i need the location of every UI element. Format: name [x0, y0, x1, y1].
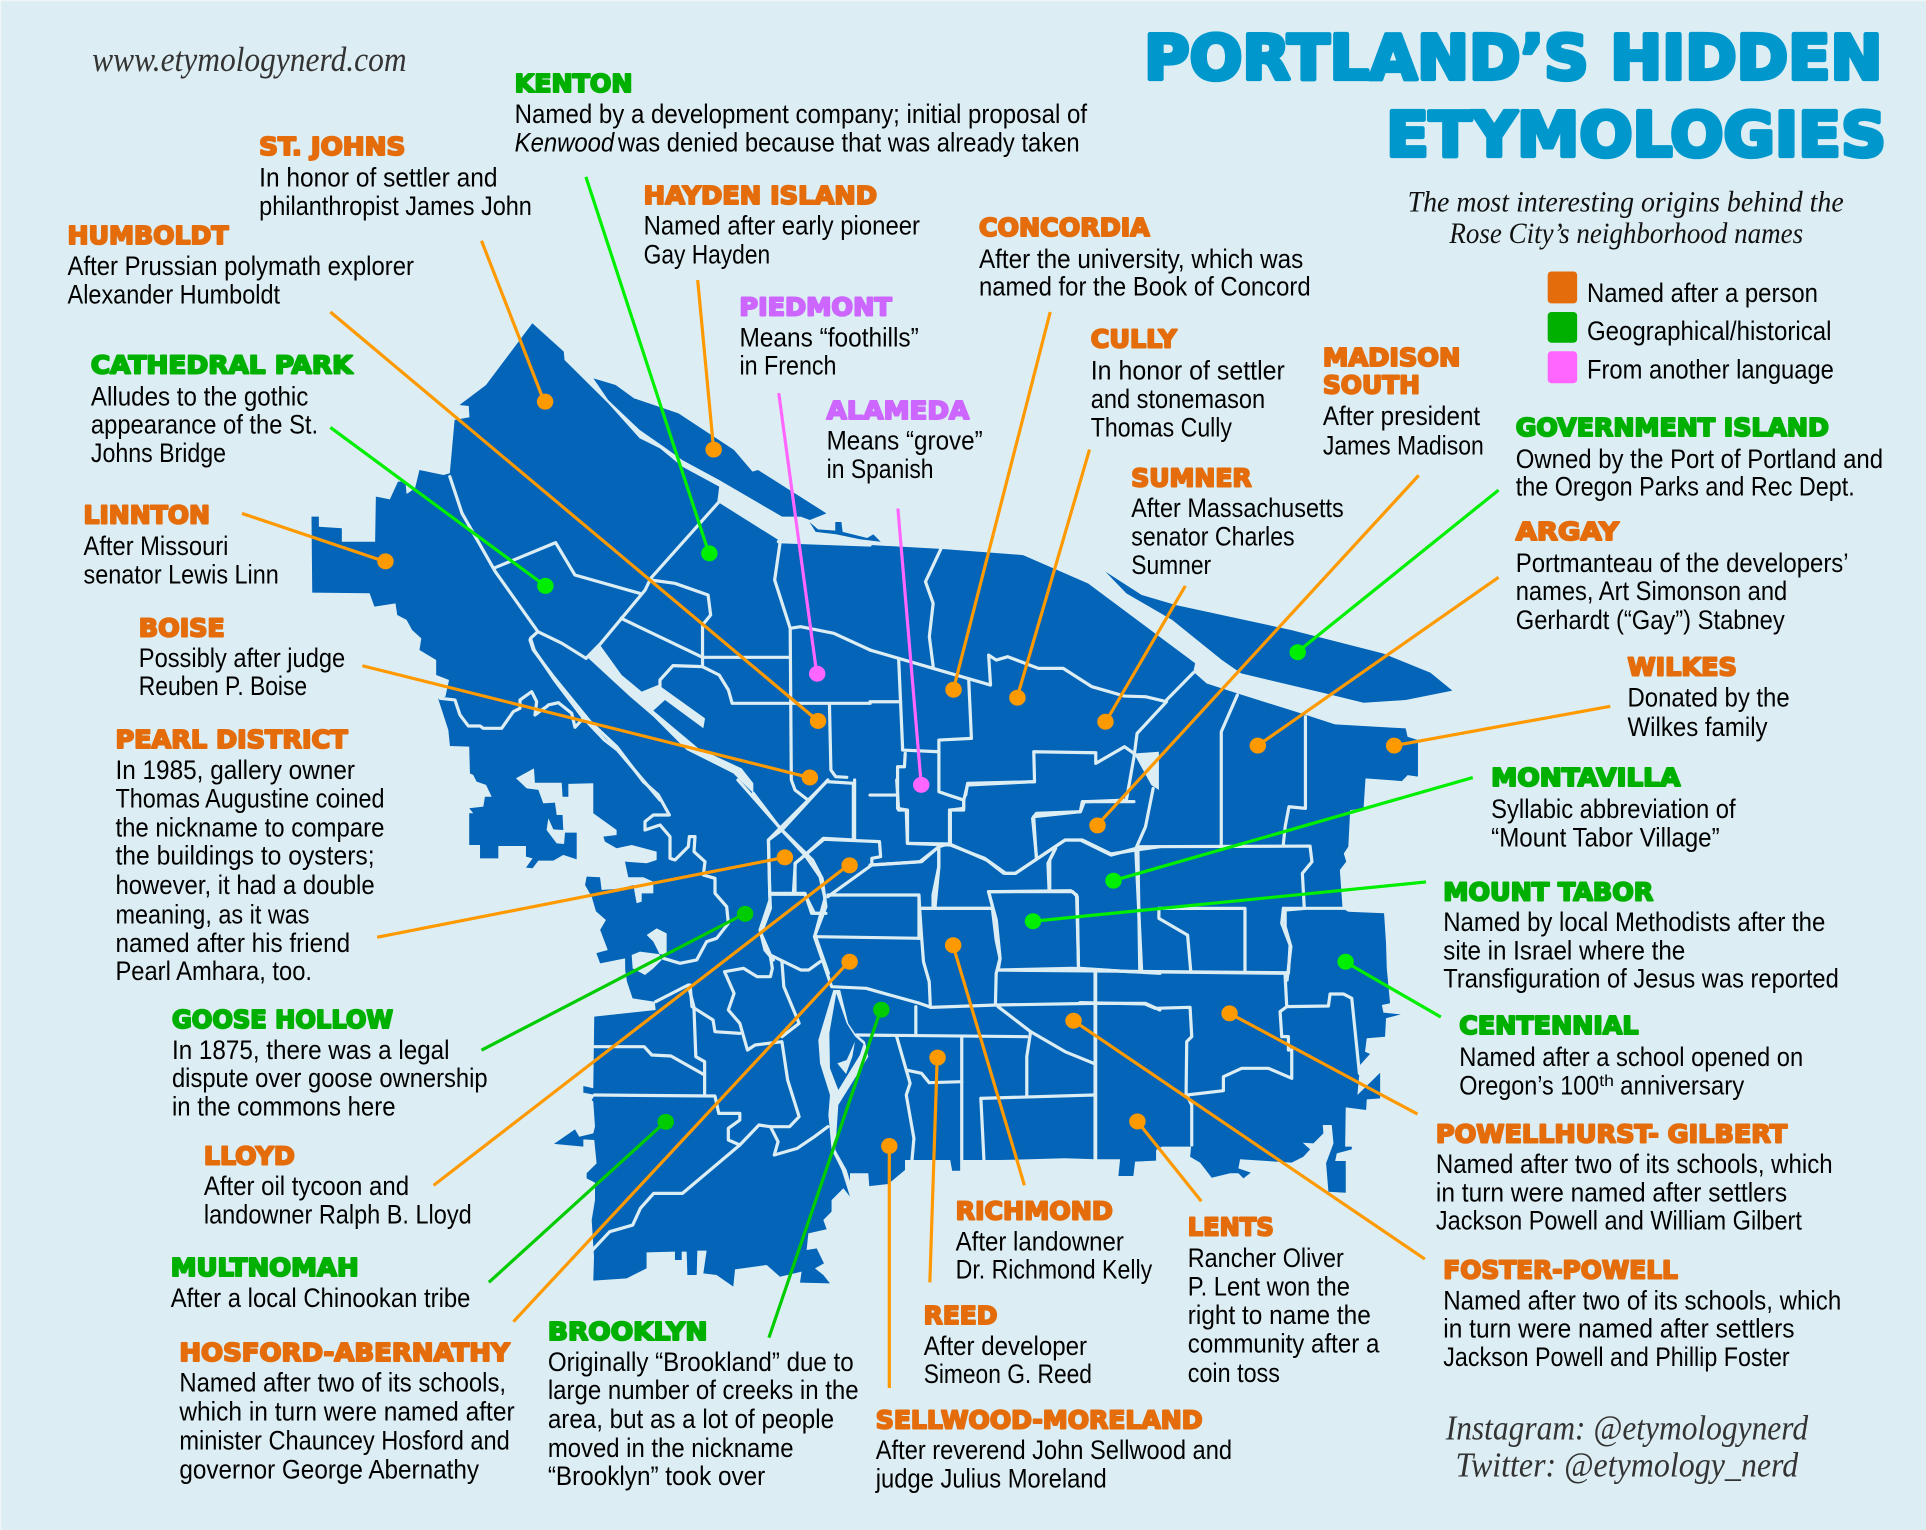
connector: Foster-Powell	[1066, 1013, 1425, 1259]
connector: Brooklyn	[769, 1002, 889, 1338]
label: Government Island: Owned by the Port of Portland and	[1516, 444, 1883, 474]
label: Goose Hollow	[172, 1005, 488, 1121]
social handles: Twitter: @etymology_nerd	[1456, 1446, 1799, 1484]
label: Pearl District: meaning, as it was	[115, 900, 310, 930]
label: Piedmont	[739, 293, 919, 381]
label: Cathedral Park: Alludes to the gothic	[91, 381, 308, 411]
connector: Mount Tabor	[1025, 882, 1426, 929]
label: Cathedral Park: appearance of the St.	[91, 410, 318, 440]
label: Hosford-Abernathy: Named after two of its schools,	[179, 1368, 506, 1398]
connector: Wilkes	[1387, 706, 1610, 753]
label: Goose Hollow: dispute over goose ownership	[172, 1063, 488, 1093]
label: Concordia: named for the Book of Concord	[979, 271, 1311, 301]
legend: Geographical/historical	[1587, 316, 1831, 346]
label: Piedmont: in French	[739, 351, 836, 381]
label: Kenton: was denied because that was already taken	[617, 128, 1080, 158]
label: Humboldt	[68, 221, 414, 309]
label: Centennial: CENTENNIAL	[1459, 1011, 1639, 1040]
label: Madison South: MADISON	[1323, 343, 1460, 372]
label: Lents: right to name the	[1188, 1300, 1371, 1330]
label: Boise: BOISE	[139, 613, 225, 642]
connector: Linnton	[242, 513, 393, 569]
connector: Government Island	[1290, 490, 1499, 660]
label: Argay: Gerhardt (“Gay”) Stabney	[1516, 605, 1785, 635]
title	[1144, 23, 1886, 171]
label: Mount Tabor: site in Israel where the	[1443, 935, 1685, 965]
label: Powellhurst-Gilbert: Jackson Powell and William Gilbert	[1436, 1206, 1803, 1236]
label: Mount Tabor: Named by local Methodists after the	[1443, 907, 1825, 937]
label: Sellwood-Moreland: judge Julius Moreland	[875, 1463, 1107, 1493]
legend: From another language	[1587, 354, 1834, 384]
label: Richmond: RICHMOND	[956, 1197, 1113, 1226]
label: Hayden Island: HAYDEN ISLAND	[644, 181, 877, 210]
label: Multnomah: MULTNOMAH	[171, 1253, 359, 1282]
label: Cathedral Park: Johns Bridge	[91, 438, 226, 468]
label: Reed	[924, 1301, 1092, 1389]
label: Sellwood-Moreland: After reverend John Sellwood and	[876, 1435, 1232, 1465]
label: Montavilla: “Mount Tabor Village”	[1491, 822, 1720, 852]
label: Piedmont: PIEDMONT	[739, 293, 892, 322]
label: Mount Tabor: Transfiguration of Jesus was reported	[1443, 964, 1839, 994]
label: Government Island	[1516, 413, 1883, 502]
label: Centennial: th	[1599, 1073, 1614, 1090]
label: Humboldt: After Prussian polymath explorer	[68, 251, 414, 281]
connector: Kenton	[586, 177, 717, 561]
label: Concordia: CONCORDIA	[979, 213, 1150, 242]
label: Humboldt: HUMBOLDT	[68, 221, 229, 250]
label: Cathedral Park	[91, 350, 354, 468]
label: Cully	[1091, 325, 1285, 443]
label: Foster-Powell: Jackson Powell and Phillip Foster	[1443, 1342, 1790, 1372]
label: Argay: Portmanteau of the developers’	[1516, 548, 1849, 578]
label: Sumner: After Massachusetts	[1131, 493, 1344, 523]
label: Madison South	[1323, 343, 1484, 460]
connector: Cathedral Park	[330, 427, 553, 593]
label: St. Johns: ST. JOHNS	[259, 132, 405, 161]
map of Portland neighborhoods	[312, 323, 1452, 1287]
label: Brooklyn	[548, 1317, 859, 1491]
label: Hosford-Abernathy: governor George Abernathy	[179, 1454, 480, 1484]
label: Brooklyn: area, but as a lot of people	[548, 1404, 834, 1434]
connector: Montavilla	[1106, 778, 1473, 888]
connector: Piedmont	[779, 393, 825, 681]
label: Linnton	[84, 500, 279, 589]
label: Cully: CULLY	[1091, 325, 1178, 354]
connector: Sellwood-Moreland	[882, 1139, 897, 1388]
connector: St. Johns	[482, 241, 553, 409]
neighborhood boundaries north-west	[450, 477, 870, 800]
label: Boise: Possibly after judge	[139, 643, 345, 673]
subtitle: Rose City’s neighborhood names	[1448, 218, 1803, 250]
label: Lents: community after a	[1188, 1328, 1380, 1358]
label: Foster-Powell: in turn were named after settlers	[1443, 1314, 1795, 1344]
Hayden Island	[593, 378, 826, 520]
label: Multnomah	[171, 1253, 470, 1313]
label: Lents: LENTS	[1188, 1213, 1274, 1242]
label: Government Island: GOVERNMENT ISLAND	[1516, 413, 1829, 442]
label: Alameda: Means “grove”	[827, 426, 983, 456]
label: Multnomah: After a local Chinookan tribe	[171, 1283, 470, 1313]
connector: Concordia	[946, 312, 1050, 697]
label: Lents: coin toss	[1188, 1358, 1280, 1388]
label: Madison South: After president	[1323, 401, 1481, 431]
label: Brooklyn: “Brooklyn” took over	[548, 1461, 765, 1491]
social handles	[1445, 1410, 1809, 1484]
label: Richmond: After landowner	[956, 1226, 1124, 1256]
label: Foster-Powell: Named after two of its schools, which	[1443, 1285, 1841, 1315]
label: Linnton: LINNTON	[84, 500, 210, 529]
label: Lloyd: After oil tycoon and	[204, 1171, 409, 1201]
label: Sellwood-Moreland	[875, 1406, 1232, 1493]
label: Reed: Simeon G. Reed	[924, 1359, 1092, 1389]
label: Powellhurst-Gilbert: POWELLHURST- GILBERT	[1436, 1119, 1787, 1148]
label: Powellhurst-Gilbert: in turn were named after settlers	[1436, 1177, 1787, 1207]
connector: Hayden Island	[698, 280, 721, 457]
label: Goose Hollow: GOOSE HOLLOW	[172, 1005, 393, 1034]
connector: Madison South	[1090, 475, 1419, 833]
title: PORTLAND’S HIDDEN	[1144, 23, 1882, 94]
legend	[1548, 271, 1834, 384]
label: Lents: P. Lent won the	[1188, 1271, 1350, 1301]
label: Alameda: in Spanish	[827, 454, 934, 484]
connector: Alameda	[898, 509, 929, 792]
label: Kenton: Named by a development company; initial proposal of	[515, 99, 1088, 129]
label: Argay: names, Art Simonson and	[1516, 576, 1787, 606]
Guilds Lake pond	[632, 928, 667, 975]
connector: Boise	[362, 666, 817, 785]
label: Lents	[1188, 1213, 1380, 1388]
connector: Reed	[930, 1050, 945, 1282]
label: Brooklyn: BROOKLYN	[548, 1317, 708, 1346]
label: Hosford-Abernathy	[178, 1338, 515, 1484]
neighborhood boundaries east	[1080, 908, 1359, 1158]
Government Island	[1105, 572, 1452, 703]
connector: Lloyd	[434, 858, 857, 1185]
label: Wilkes: Donated by the	[1628, 682, 1790, 712]
label: Montavilla: Syllabic abbreviation of	[1491, 794, 1736, 824]
label: Foster-Powell	[1443, 1256, 1841, 1372]
label: Sellwood-Moreland: SELLWOOD-MORELAND	[876, 1406, 1203, 1435]
label: Brooklyn: Originally “Brookland” due to	[548, 1347, 854, 1377]
label: Goose Hollow: in the commons here	[172, 1091, 396, 1121]
label: Lloyd: LLOYD	[204, 1141, 295, 1170]
label: Richmond	[956, 1197, 1153, 1285]
connector: Multnomah	[489, 1114, 673, 1282]
label: Lents: Rancher Oliver	[1188, 1243, 1344, 1273]
neighborhood boundaries west hills	[440, 640, 853, 973]
label: Foster-Powell: FOSTER-POWELL	[1443, 1256, 1678, 1285]
Willamette River channel	[818, 990, 868, 1197]
label: Cully: In honor of settler	[1091, 356, 1285, 386]
label: Powellhurst-Gilbert: Named after two of its schools, which	[1436, 1149, 1833, 1179]
title: ETYMOLOGIES	[1386, 100, 1886, 171]
Holgate slough	[837, 1042, 855, 1074]
label: Hayden Island: Gay Hayden	[644, 239, 770, 269]
label: Pearl District: named after his friend	[115, 928, 350, 958]
label: Wilkes	[1628, 653, 1790, 742]
label: Hosford-Abernathy: HOSFORD-ABERNATHY	[179, 1338, 511, 1367]
label: Reed: REED	[924, 1301, 997, 1330]
subtitle	[1408, 186, 1844, 250]
label: Hayden Island	[644, 181, 920, 269]
label: Wilkes: Wilkes family	[1628, 712, 1768, 742]
label: Kenton: Kenwood	[515, 128, 615, 158]
website url: www.etymologynerd.com	[92, 41, 407, 79]
legend: Named after a person	[1587, 278, 1818, 308]
connector: Goose Hollow	[482, 907, 753, 1050]
label: Sumner: SUMNER	[1131, 463, 1252, 492]
label: Kenton	[515, 69, 1088, 158]
connector: Sumner	[1098, 586, 1185, 729]
connector: Cully	[1010, 450, 1090, 705]
label: Reed: After developer	[924, 1331, 1087, 1361]
label: Hayden Island: Named after early pioneer	[644, 211, 920, 241]
label: Government Island: the Oregon Parks and Rec Dept.	[1516, 472, 1855, 502]
neighborhood boundaries central and south	[593, 780, 1160, 1250]
label: Mount Tabor: MOUNT TABOR	[1443, 877, 1653, 906]
label: St. Johns	[259, 132, 532, 221]
label: Montavilla	[1491, 763, 1736, 852]
label: Hosford-Abernathy: which in turn were named after	[178, 1397, 515, 1427]
label: Pearl District	[115, 725, 384, 986]
label: Brooklyn: large number of creeks in the	[548, 1375, 859, 1405]
label: Brooklyn: moved in the nickname	[548, 1433, 793, 1463]
label: Centennial: Oregon’s 100	[1459, 1070, 1599, 1100]
label: Richmond: Dr. Richmond Kelly	[956, 1255, 1153, 1285]
label: Pearl District: PEARL DISTRICT	[115, 725, 348, 754]
label: Pearl District: Pearl Amhara, too.	[115, 956, 312, 986]
label: Pearl District: In 1985, gallery owner	[115, 755, 355, 785]
label: Argay	[1516, 517, 1849, 635]
label: Lloyd: landowner Ralph B. Lloyd	[204, 1199, 472, 1229]
neighborhood boundaries north-east	[870, 549, 1312, 980]
label: Argay: ARGAY	[1516, 517, 1620, 546]
label: Powellhurst-Gilbert	[1436, 1119, 1833, 1236]
label: Alameda	[827, 396, 983, 484]
connector: Powellhurst-Gilbert	[1222, 1006, 1417, 1114]
label: Concordia	[979, 213, 1311, 301]
connector: Centennial	[1338, 954, 1441, 1017]
label: Lloyd	[204, 1141, 472, 1229]
connector: Richmond	[946, 938, 1024, 1185]
label: Madison South: SOUTH	[1323, 371, 1420, 400]
label: Linnton: senator Lewis Linn	[84, 559, 279, 589]
label: Kenton: KENTON	[515, 69, 633, 98]
label: St. Johns: In honor of settler and	[259, 163, 497, 193]
label: Concordia: After the university, which was	[979, 244, 1303, 274]
label: St. Johns: philanthropist James John	[259, 191, 532, 221]
label: Centennial: anniversary	[1620, 1070, 1745, 1100]
label: Sumner	[1131, 463, 1344, 580]
label: Centennial: Named after a school opened on	[1459, 1042, 1803, 1072]
label: Pearl District: the nickname to compare	[115, 812, 384, 842]
label: Humboldt: Alexander Humboldt	[68, 279, 281, 309]
connector: Argay	[1250, 577, 1499, 753]
label: Sumner: Sumner	[1131, 550, 1211, 580]
label: Boise	[139, 613, 345, 701]
label: Boise: Reuben P. Boise	[139, 671, 307, 701]
connector: Pearl District	[377, 850, 793, 937]
label: Cathedral Park: CATHEDRAL PARK	[91, 350, 354, 379]
label: Alameda: ALAMEDA	[827, 396, 969, 425]
Ross Island	[829, 993, 864, 1090]
label: Piedmont: Means “foothills”	[739, 322, 919, 352]
label: Hosford-Abernathy: minister Chauncey Hosford and	[179, 1425, 510, 1455]
label: Montavilla: MONTAVILLA	[1491, 763, 1680, 792]
label: Pearl District: however, it had a double	[115, 870, 375, 900]
connector: Hosford-Abernathy	[513, 954, 857, 1322]
connector: Lents	[1130, 1114, 1201, 1201]
social handles: Instagram: @etymologynerd	[1445, 1410, 1809, 1448]
label: Pearl District: the buildings to oysters;	[115, 841, 375, 871]
Willamette River harbor	[587, 645, 753, 793]
label: Cully: and stonemason	[1091, 384, 1265, 414]
label: Linnton: After Missouri	[84, 531, 228, 561]
label: Wilkes: WILKES	[1628, 653, 1737, 682]
label: Mount Tabor	[1443, 877, 1839, 994]
label: Cully: Thomas Cully	[1091, 413, 1233, 443]
label: Madison South: James Madison	[1323, 430, 1484, 460]
label: Centennial	[1459, 1011, 1803, 1100]
water triangle near airport	[1134, 752, 1159, 790]
connector: Humboldt	[330, 312, 826, 728]
label: Goose Hollow: In 1875, there was a legal	[172, 1035, 450, 1065]
label: Sumner: senator Charles	[1131, 521, 1295, 551]
label: Pearl District: Thomas Augustine coined	[115, 784, 384, 814]
subtitle: The most interesting origins behind the	[1408, 186, 1844, 218]
east Hayden sliver	[809, 522, 881, 542]
